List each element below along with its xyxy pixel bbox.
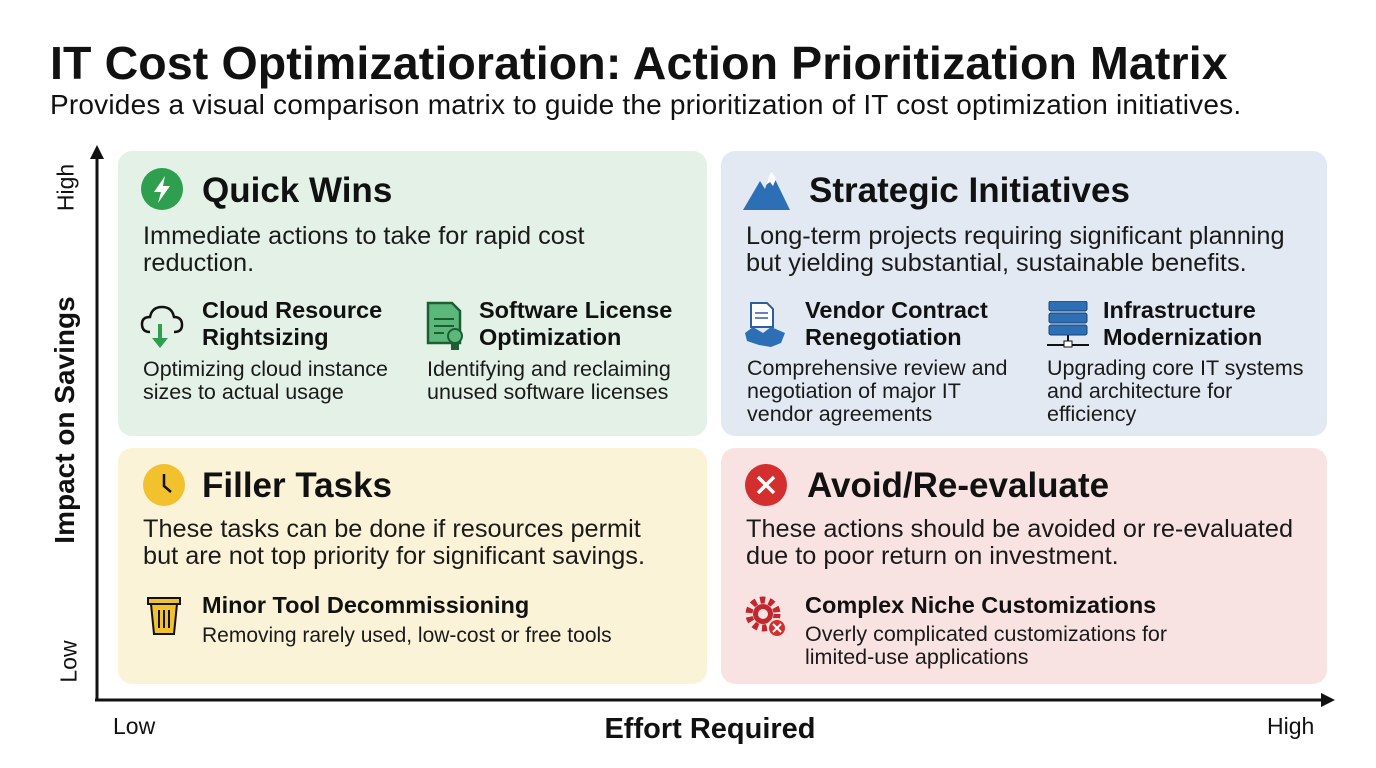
heading: Strategic Initiatives	[809, 171, 1130, 210]
x axis label: Effort Required	[604, 713, 816, 745]
panel: filler tasks: Removing rarely used, low-cost or free tools	[202, 624, 612, 647]
description	[746, 222, 1285, 277]
icon: clock	[143, 464, 185, 506]
description: but yielding substantial, sustainable benefits.	[746, 249, 1247, 277]
description: Long-term projects requiring significant planning	[746, 222, 1285, 250]
x axis	[95, 693, 1335, 707]
icon: lightning	[141, 168, 183, 210]
icon: mountain	[743, 171, 790, 210]
description: but are not top priority for significant savings.	[143, 542, 645, 570]
subtitle: Provides a visual comparison matrix to guide the prioritization of IT cost optimization initiatives.	[50, 89, 1241, 120]
item: cloud resource rightsizing	[202, 297, 382, 350]
description: These actions should be avoided or re-evaluated	[746, 515, 1293, 543]
y axis label: Impact on Savings	[49, 296, 80, 544]
item: software license optimization: Software License	[479, 297, 672, 323]
title: IT Cost Optimizatioration: Action Prioritization Matrix	[50, 37, 1228, 89]
item: vendor contract renegotiation: Vendor Contract	[805, 297, 988, 323]
item: vendor contract renegotiation: Renegotiation	[805, 324, 962, 350]
description	[143, 515, 645, 570]
panel: strategic initiatives: negotiation of major IT	[747, 379, 961, 403]
item: software license optimization	[479, 297, 672, 350]
x high label: High	[1267, 713, 1314, 739]
y axis	[90, 145, 104, 698]
item: complex niche customizations: Complex Niche Customizations	[805, 592, 1156, 618]
icon: server	[1047, 301, 1089, 348]
item: infrastructure modernization: Infrastructure	[1103, 297, 1256, 323]
item: infrastructure modernization	[1103, 297, 1262, 350]
item: minor tool decommissioning: Minor Tool Decommissioning	[202, 592, 529, 618]
icon: trash	[147, 597, 181, 635]
icon: cloud	[140, 306, 184, 348]
panel: avoid/re-evaluate: limited-use applications	[805, 645, 1028, 669]
heading: Avoid/Re-evaluate	[807, 466, 1109, 505]
panel: strategic initiatives: vendor agreements	[747, 402, 932, 426]
item: infrastructure modernization: Modernization	[1103, 324, 1262, 350]
panel: quick wins: Identifying and reclaiming unused software licenses	[427, 357, 671, 404]
icon: gear x	[746, 596, 785, 636]
panel: strategic initiatives: and architecture for	[1047, 379, 1232, 403]
panel: strategic initiatives: Comprehensive review and	[747, 356, 1008, 380]
heading: Quick Wins	[202, 171, 392, 210]
description: These tasks can be done if resources permit	[143, 515, 641, 543]
panel: quick wins	[118, 151, 707, 436]
icon: handshake contract	[745, 302, 785, 347]
item: cloud resource rightsizing: Cloud Resource	[202, 297, 382, 323]
item: vendor contract renegotiation	[805, 297, 988, 350]
y low label: Low	[56, 640, 82, 683]
icon: x circle	[745, 464, 787, 506]
icon: license doc	[426, 302, 463, 350]
description: Immediate actions to take for rapid cost reduction.	[143, 222, 584, 277]
item: cloud resource rightsizing: Rightsizing	[202, 324, 329, 350]
x low label: Low	[113, 713, 155, 739]
item: software license optimization: Optimization	[479, 324, 621, 350]
description	[746, 515, 1293, 570]
panel: strategic initiatives: efficiency	[1047, 402, 1136, 426]
heading: Filler Tasks	[202, 466, 392, 505]
panel: strategic initiatives	[721, 151, 1327, 436]
description: due to poor return on investment.	[746, 542, 1119, 570]
y high label: High	[52, 164, 78, 211]
panel: quick wins: Optimizing cloud instance sizes to actual usage	[143, 357, 388, 404]
panel: strategic initiatives: Upgrading core IT systems	[1047, 356, 1304, 380]
panel: filler tasks	[118, 448, 707, 684]
panel: avoid/re-evaluate	[721, 448, 1327, 684]
panel: avoid/re-evaluate: Overly complicated customizations for	[805, 622, 1167, 646]
